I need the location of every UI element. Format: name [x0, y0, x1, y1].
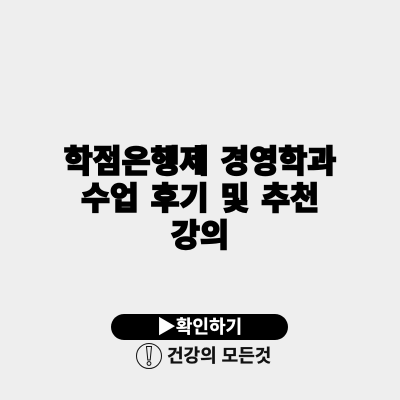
caption: 건강의 모든것: 건강의 모든것: [167, 346, 271, 366]
icon: exclamation in circle: [136, 343, 162, 369]
title: 강의: [171, 217, 229, 253]
title: [64, 143, 336, 253]
button: 확인하기: [111, 314, 288, 340]
button: 확인하기: ▶확인하기: [157, 317, 242, 338]
title: 학점은행제 경영학과: [64, 143, 336, 179]
title: 수업 후기 및 추천: [81, 180, 319, 216]
